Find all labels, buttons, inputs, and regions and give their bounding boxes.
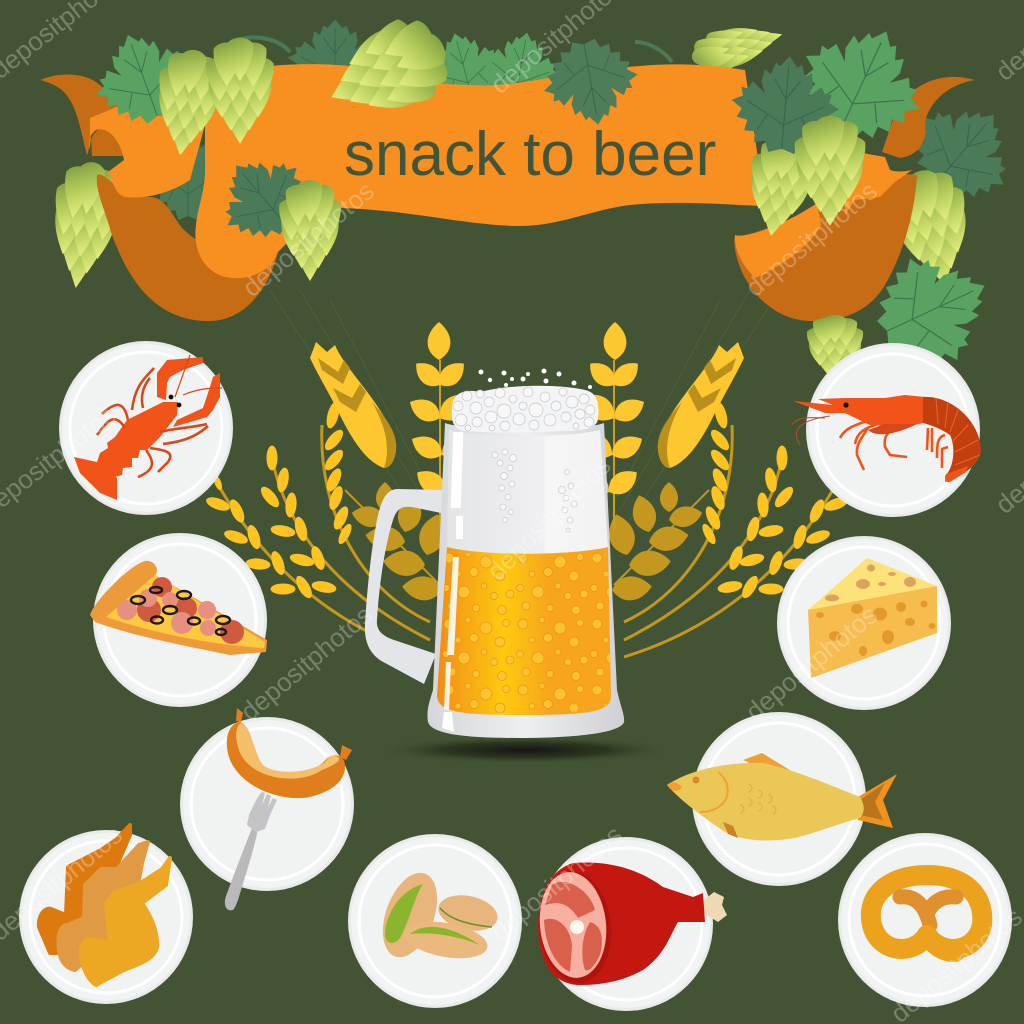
leaf: dark top: [288, 19, 382, 96]
watermarks: depositphotos: [481, 451, 617, 586]
watermarks: depositphotos: [485, 820, 628, 947]
pizza slice: [90, 561, 267, 655]
leaf: dark lower left: [202, 137, 323, 257]
right lighter fold: [735, 203, 821, 278]
leaf: dark right: [893, 81, 1024, 221]
plate: ham: [533, 837, 727, 1011]
hop: top right small: [687, 15, 788, 78]
fork: [225, 792, 277, 910]
roast chicken: [39, 825, 170, 985]
ham leg: [533, 862, 727, 986]
leaf: light top second: [475, 26, 566, 110]
hop: pair left: [149, 46, 226, 160]
right lower fold: [734, 172, 917, 321]
left tail curl: [40, 75, 128, 156]
right orange strip: [845, 150, 912, 215]
pistachios: [372, 865, 501, 965]
plate: sausage: [180, 708, 354, 910]
wheat wreath, left side: [204, 322, 482, 657]
hop: left tail: [43, 158, 126, 293]
stem arcs: [232, 37, 672, 62]
fish: [667, 753, 897, 840]
left tail strip: [89, 100, 205, 198]
left lower fold: [97, 174, 278, 321]
glass body: [427, 423, 624, 738]
beer bubbles: [440, 550, 611, 713]
watermarks: depositphotos: [740, 176, 883, 303]
hop: pair right: [206, 38, 274, 144]
cheese wedge: [808, 558, 937, 678]
wheat wreath, right side: [572, 322, 850, 657]
plate: cheese: [777, 536, 951, 710]
title: snack to beer: [344, 120, 716, 189]
leaf: light left: [81, 18, 206, 137]
faint rays behind the wheat: [270, 290, 780, 520]
crayfish: [74, 355, 222, 500]
leaf: light right: [782, 5, 943, 160]
leaf: dark behind banner left: [148, 130, 228, 220]
plate: crayfish: [59, 341, 233, 515]
hop: right front: [795, 116, 865, 226]
foam: [452, 368, 598, 432]
glass highlights: [442, 432, 463, 732]
banner: [40, 64, 975, 321]
hop: right back: [740, 134, 819, 241]
upper empty glass: [447, 430, 608, 554]
plate: pistachios: [348, 834, 522, 1008]
beer fill: [437, 547, 611, 715]
hop: lower left: [279, 180, 341, 281]
garland front: [81, 5, 1008, 384]
pretzel: [871, 875, 982, 952]
hop: right low: [884, 163, 981, 293]
hop: bottom right: [807, 315, 863, 382]
banner main front: [195, 64, 765, 278]
hop: sideways on banner: [313, 7, 461, 136]
plate: pretzel: [838, 833, 1012, 1007]
watermarks: depositphotos: [235, 600, 378, 727]
shrimp: [792, 395, 981, 482]
plate: shrimp: [792, 343, 981, 517]
bubbles on the glass: [492, 449, 577, 532]
watermarks: depositphotos: [740, 600, 883, 727]
leaf: light top: [416, 23, 512, 113]
plate: pizza: [90, 533, 267, 707]
right tail: [882, 77, 975, 158]
mug handle: [365, 489, 446, 684]
sausage: [227, 708, 352, 798]
plate: chicken: [19, 825, 193, 1004]
leaf: dark right front: [727, 51, 844, 158]
leaf: dark on banner: [537, 32, 645, 133]
mug shadow: [375, 736, 675, 764]
leaf: light bottom right: [859, 235, 1008, 384]
watermarks: depositphotos: [237, 176, 380, 303]
plate: fish: [667, 712, 897, 886]
back leaves of the garland: [148, 15, 1024, 293]
